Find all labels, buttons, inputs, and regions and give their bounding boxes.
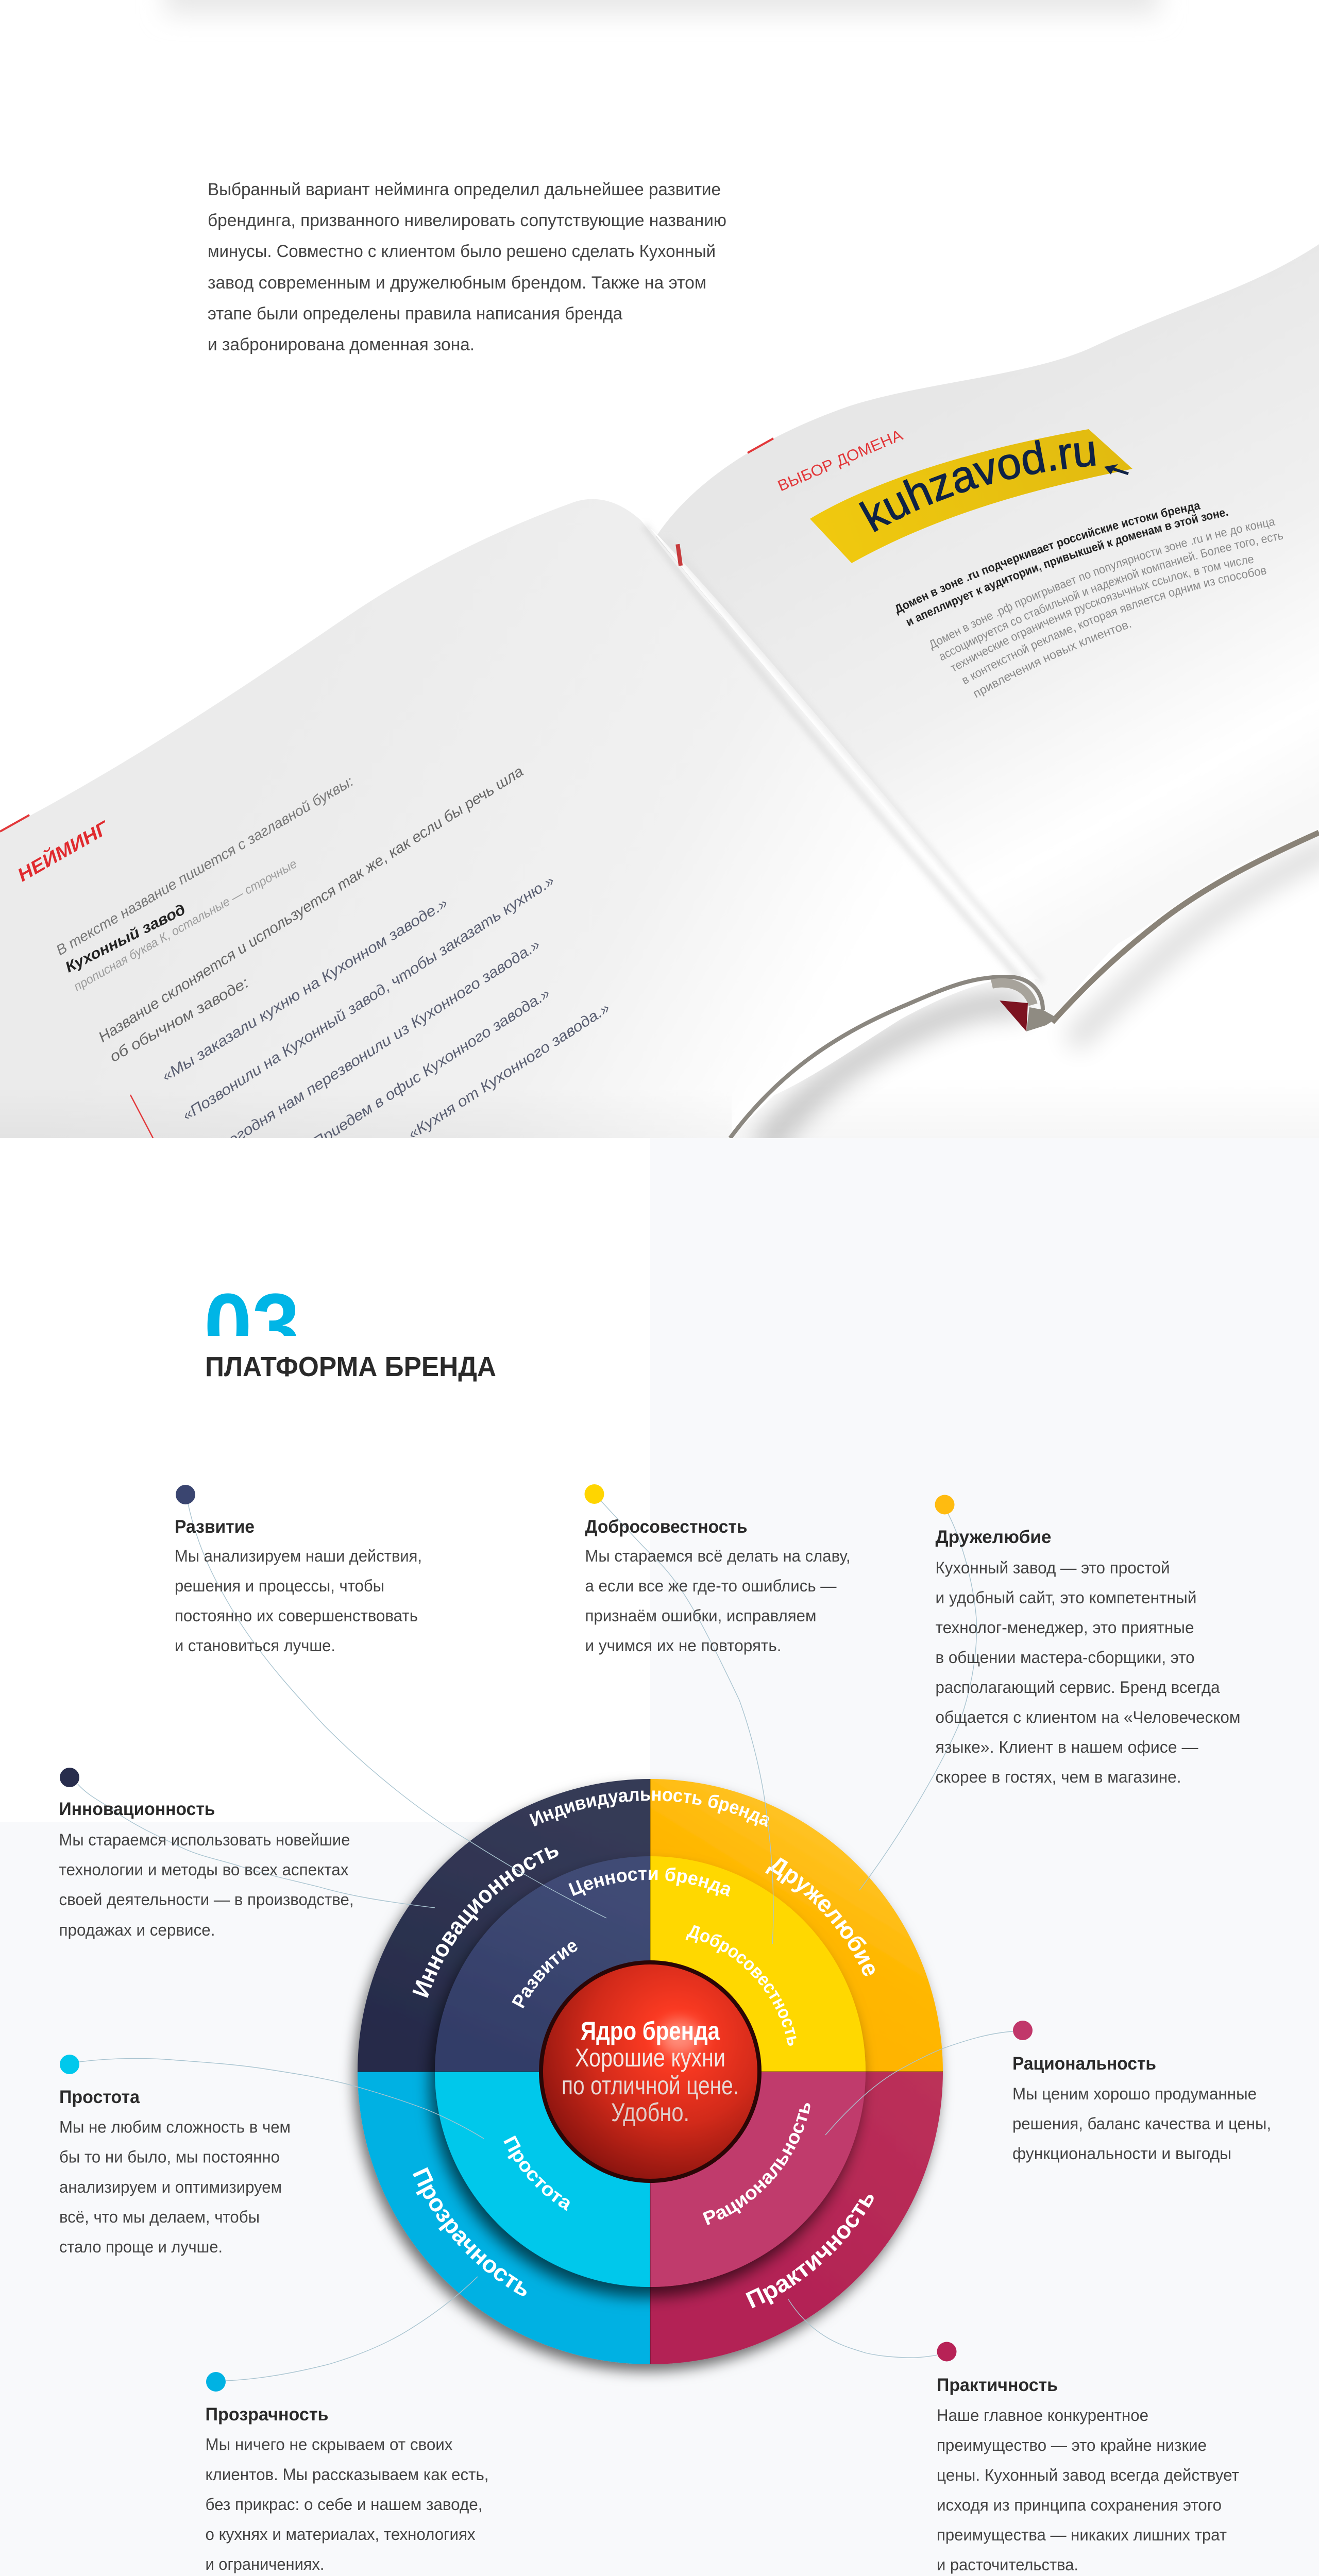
middle ring labels: Добросовестность	[685, 1920, 805, 2048]
body text: решения, баланс качества и цены,	[1012, 2114, 1271, 2133]
intro paragraph: Выбранный вариант нейминга определил дальнейшее развитие	[208, 180, 721, 199]
callout: Практичность	[937, 2342, 1239, 2574]
naming rules text: прописная буква К, остальные — строчные	[72, 857, 299, 994]
body text: языке». Клиент в нашем офисе —	[936, 1738, 1198, 1756]
heading: Практичность	[937, 2375, 1058, 2395]
outer ring labels: Индивидуальность бренда	[527, 1784, 774, 1831]
body text: всё, что мы делаем, чтобы	[59, 2208, 260, 2226]
icon: cursor	[1104, 464, 1129, 475]
body text: исходя из принципа сохранения этого	[937, 2496, 1222, 2514]
dot	[60, 1768, 79, 1787]
body text	[936, 1558, 1241, 1786]
intro paragraph: брендинга, призванного нивелировать сопутствующие названию	[208, 211, 726, 230]
body text	[59, 1831, 353, 1939]
domain body text: и апеллирует к аудитории, привыкшей к доменам в этой зоне.	[906, 510, 1228, 626]
heading: Добросовестность	[585, 1517, 747, 1537]
body text: Мы стараемся использовать новейшие	[59, 1831, 350, 1849]
body text	[59, 2117, 291, 2256]
body text: и становиться лучше.	[175, 1636, 335, 1655]
domain body text: технические ограничения русскоязычных ссылок, в том числе	[950, 556, 1254, 671]
brand wheel diagram	[358, 1779, 943, 2364]
core text	[562, 2016, 739, 2127]
spine crease	[644, 526, 1043, 981]
body text: а если все же где-то ошиблись —	[585, 1577, 837, 1595]
body text	[937, 2406, 1239, 2574]
body text: стало проще и лучше.	[59, 2238, 223, 2256]
dot	[584, 1484, 604, 1504]
body text: без прикрас: о себе и нашем заводе,	[205, 2495, 482, 2514]
section number 03 (clipped): 03	[204, 1275, 300, 1378]
outer ring labels: Прозрачность	[408, 2163, 536, 2302]
body text: анализируем и оптимизируем	[59, 2178, 282, 2196]
callout: Развитие	[175, 1485, 422, 1655]
body text: бы то ни было, мы постоянно	[59, 2147, 280, 2166]
domain name: kuhzavod.ru	[858, 440, 1096, 532]
callout: Рациональность	[1012, 2021, 1271, 2163]
naming rules text: «Кухня от Кухонного завода.»	[405, 999, 613, 1143]
core text: Хорошие кухни	[575, 2043, 725, 2072]
middle ring: brand values	[435, 1856, 866, 2287]
body text: постоянно их совершенствовать	[175, 1606, 418, 1625]
heading: Дружелюбие	[936, 1527, 1051, 1547]
domain body text: в контекстной рекламе, которая является одним из способов	[962, 568, 1266, 684]
outer ring labels	[407, 1784, 885, 2314]
core text: по отличной цене.	[562, 2071, 739, 2100]
outer ring labels: Практичность	[742, 2185, 880, 2314]
body text: располагающий сервис. Бренд всегда	[936, 1678, 1220, 1697]
top fading shadow of previous section	[165, 0, 1159, 14]
body text: Наше главное конкурентное	[937, 2406, 1148, 2425]
right page	[656, 244, 1319, 819]
intro paragraph: и забронирована доменная зона.	[208, 335, 475, 354]
red inner cover	[1000, 1001, 1028, 1031]
dot	[1013, 2021, 1033, 2040]
body text: технолог-менеджер, это приятные	[936, 1618, 1194, 1637]
body text: Мы не любим сложность в чем	[59, 2117, 291, 2136]
naming rules text: «Приедем в офис Кухонного завода.»	[302, 985, 553, 1156]
callout: Простота	[59, 2055, 291, 2256]
heading: Инновационность	[59, 1799, 215, 1819]
body text: преимущество — это крайне низкие	[937, 2436, 1207, 2454]
heading: Рациональность	[1012, 2054, 1156, 2074]
middle ring labels	[499, 1863, 815, 2229]
body text: преимущества — никаких лишних трат	[937, 2526, 1227, 2544]
dot	[935, 1495, 954, 1515]
naming rules text: «Мы заказали кухню на Кухонном заводе.»	[159, 895, 451, 1085]
body text: скорее в гостях, чем в магазине.	[936, 1768, 1181, 1786]
body text: Кухонный завод — это простой	[936, 1558, 1170, 1577]
body text: и расточительства.	[937, 2555, 1078, 2574]
body text: Мы анализируем наши действия,	[175, 1547, 422, 1565]
body text: своей деятельности — в производстве,	[59, 1890, 353, 1909]
connector lines from callouts to wheel	[78, 1501, 1013, 2381]
dot	[60, 2055, 79, 2074]
body text	[1012, 2084, 1271, 2163]
domain body text: Домен в зоне .рф проигрывает по популярности зоне .ru и не до конца	[930, 519, 1276, 651]
body text: технологии и методы во всех аспектах	[59, 1860, 348, 1879]
section heading: ПЛАТФОРМА БРЕНДА	[205, 1351, 496, 1382]
body text: признаём ошибки, исправляем	[585, 1606, 816, 1625]
dot	[176, 1485, 195, 1504]
brand core sphere	[539, 1960, 762, 2183]
heading: Развитие	[175, 1517, 255, 1537]
core text: Ядро бренда	[581, 2016, 720, 2045]
heading: naming: НЕЙМИНГ	[13, 816, 113, 886]
naming rules text: Название склоняется и используется так же, как если бы речь шла	[96, 763, 527, 1046]
open book mockup: naming and domain spread	[0, 244, 1319, 1138]
middle ring labels: Ценности бренда	[566, 1863, 735, 1901]
domain body text: ассоциируется со стабильной и надежной компанией. Более того, есть	[940, 534, 1283, 660]
heading: domain choice: ВЫБОР ДОМЕНА	[775, 427, 905, 495]
body text: общается с клиентом на «Человеческом	[936, 1708, 1241, 1726]
heading: Прозрачность	[205, 2404, 329, 2425]
page stacks	[730, 833, 1319, 1138]
body text: и учимся их не повторять.	[585, 1636, 781, 1655]
naming rules text: В тексте название пишется с заглавной буквы:	[53, 773, 356, 958]
callout: Прозрачность	[205, 2372, 488, 2573]
naming rules text: «Позвонили на Кухонный завод, чтобы заказать кухню.»	[179, 872, 557, 1124]
middle ring labels: Рациональность	[700, 2099, 815, 2229]
body text	[585, 1547, 850, 1655]
body text: клиентов. Мы рассказываем как есть,	[205, 2465, 488, 2484]
body text: функциональности и выгоды	[1012, 2144, 1231, 2163]
body text: о кухнях и материалах, технологиях	[205, 2525, 475, 2544]
body text: решения и процессы, чтобы	[175, 1577, 384, 1595]
callout: Инновационность	[59, 1768, 353, 1939]
domain body text	[892, 498, 1284, 700]
left page	[0, 499, 1035, 1138]
intro paragraph	[208, 180, 726, 354]
body text: Мы ценим хорошо продуманные	[1012, 2084, 1257, 2103]
intro paragraph: этапе были определены правила написания бренда	[208, 304, 622, 324]
body text: Мы стараемся всё делать на славу,	[585, 1547, 850, 1565]
body text: и ограничениях.	[205, 2555, 325, 2573]
intro paragraph: минусы. Совместно с клиентом было решено сделать Кухонный	[208, 242, 716, 261]
body text: в общении мастера-сборщики, это	[936, 1648, 1194, 1667]
body text	[175, 1547, 422, 1655]
left page text	[0, 763, 613, 1160]
domain body text: привлечения новых клиентов.	[971, 617, 1133, 700]
body text: продажах и сервисе.	[59, 1921, 215, 1939]
yellow domain band	[810, 429, 1132, 563]
domain body text: Домен в зоне .ru подчеркивает российские истоки бренда	[895, 503, 1200, 616]
outer ring: brand individuality	[358, 1779, 943, 2364]
middle ring labels: Простота	[499, 2132, 576, 2214]
body text	[205, 2435, 488, 2573]
right page text	[675, 429, 1283, 698]
body text: Мы ничего не скрываем от своих	[205, 2435, 452, 2453]
naming rules text: «Сегодня нам перезвонили из Кухонного завода.»	[207, 937, 543, 1160]
heading: Простота	[59, 2087, 140, 2107]
outer ring labels: Дружелюбие	[765, 1850, 885, 1980]
callout: Дружелюбие	[935, 1495, 1241, 1786]
middle ring labels: Развитие	[508, 1935, 582, 2011]
dot	[937, 2342, 956, 2362]
body text: и удобный сайт, это компетентный	[936, 1588, 1196, 1607]
outer ring labels: Инновационность	[407, 1835, 563, 2001]
body text: цены. Кухонный завод всегда действует	[937, 2466, 1239, 2484]
dot	[206, 2372, 226, 2392]
callout: Добросовестность	[584, 1484, 850, 1655]
naming rules text: Кухонный завод	[63, 901, 188, 976]
intro paragraph: завод современным и дружелюбным брендом. Также на этом	[208, 273, 706, 293]
core text: Удобно.	[611, 2098, 689, 2127]
naming rules text	[53, 763, 613, 1160]
naming rules text: об обычном заводе:	[107, 974, 252, 1065]
